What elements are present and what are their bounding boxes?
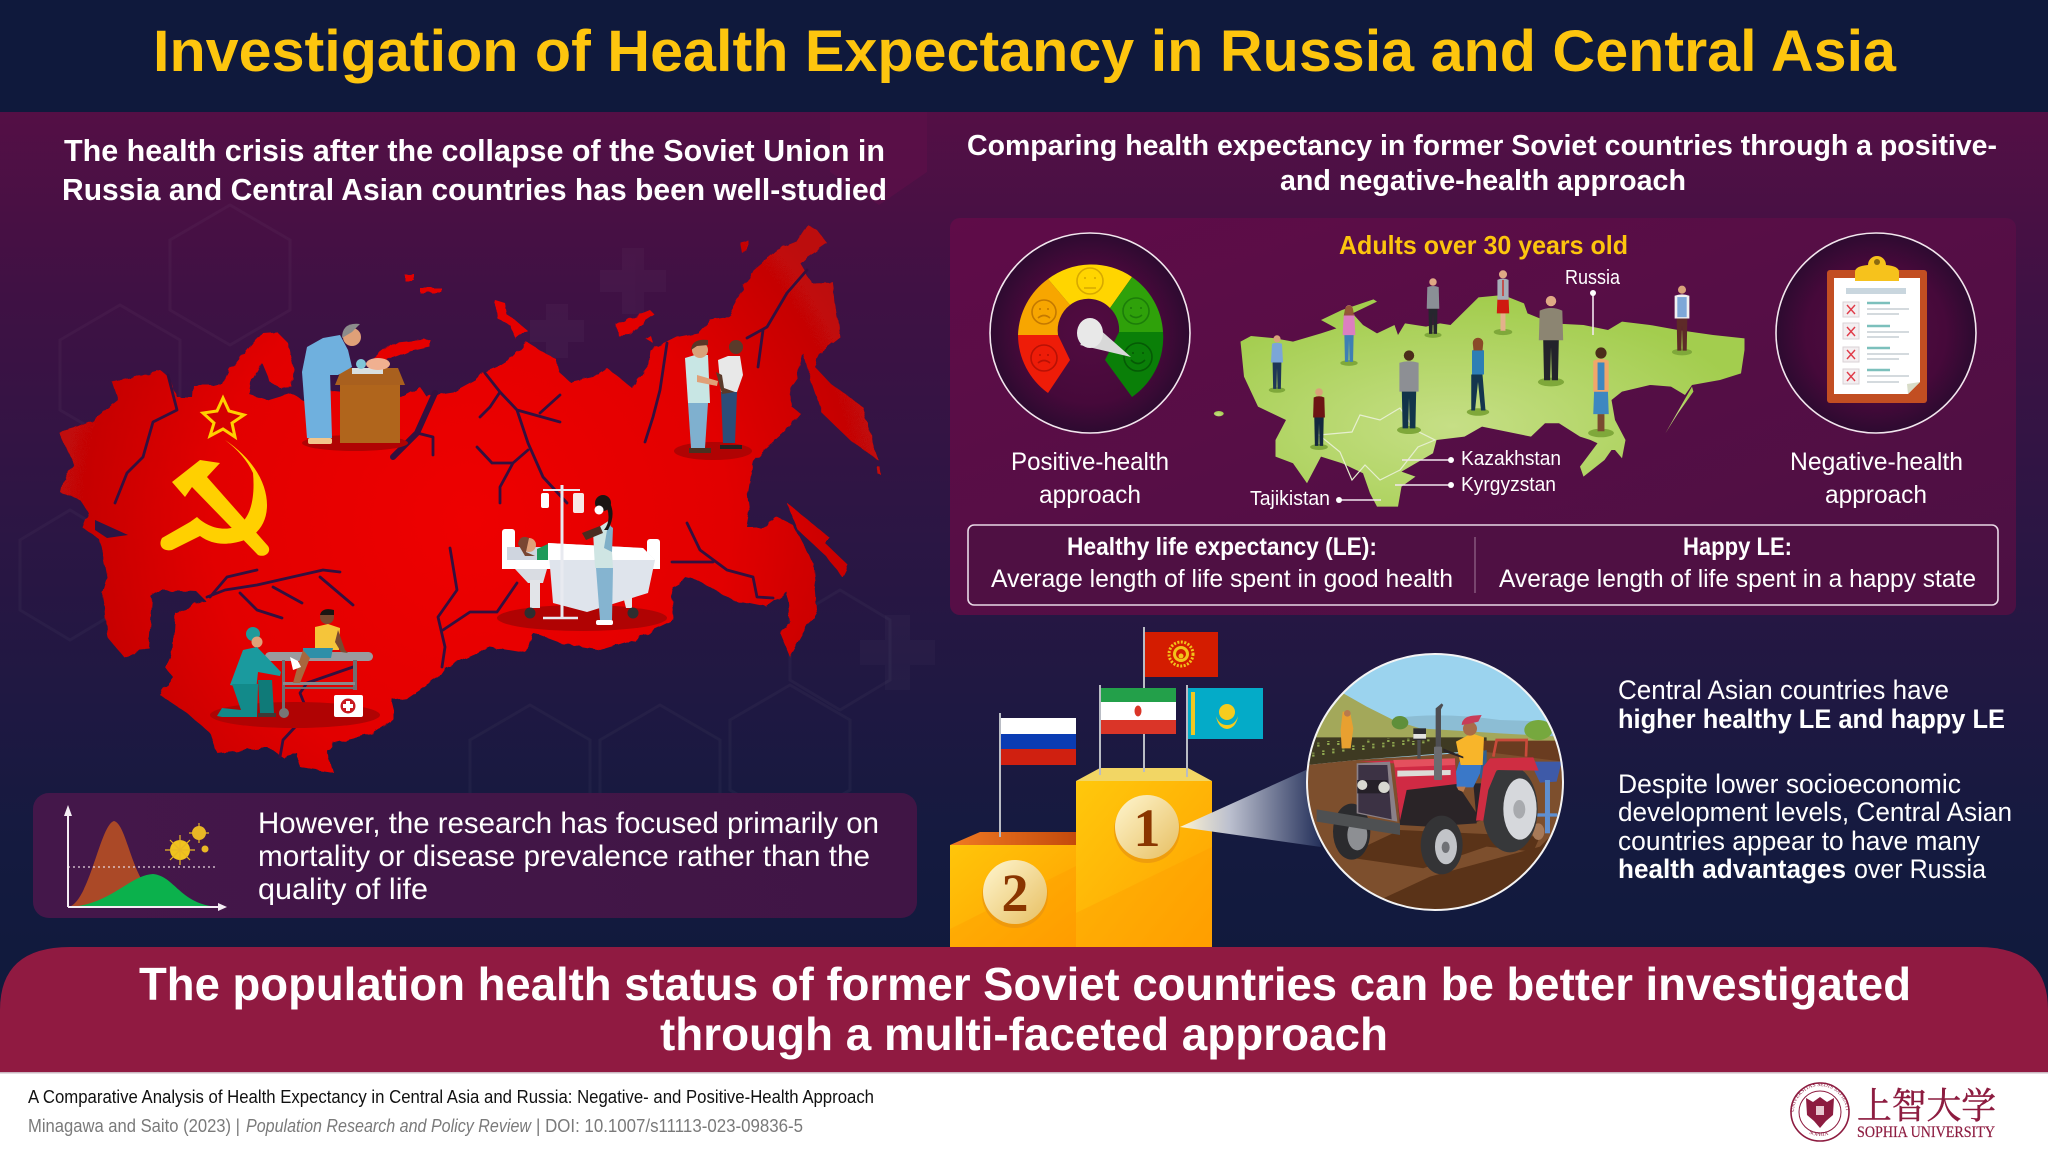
definitions box: Average length of life spent in good health bbox=[991, 565, 1453, 593]
left heading bbox=[62, 133, 887, 207]
title: Investigation of Health Expectancy in Russia and Central Asia bbox=[153, 19, 1897, 84]
soviet map with illustrations bbox=[59, 225, 881, 772]
label: positive-health bbox=[1011, 448, 1169, 509]
illustration: nurse caring for baby bbox=[302, 324, 408, 451]
conclusion banner: The population health status of former Soviet countries can be better investigated bbox=[139, 958, 1911, 1010]
map labels: Russia bbox=[1565, 267, 1621, 289]
definitions box: Average length of life spent in a happy state bbox=[1499, 565, 1976, 593]
illustration: medic treating patient on gurney bbox=[210, 609, 380, 728]
right heading: Comparing health expectancy in former Soviet countries through a positive- bbox=[967, 130, 1997, 162]
podium with flags bbox=[950, 627, 1321, 948]
definitions box: Happy LE: bbox=[1683, 533, 1792, 561]
person 7 bbox=[1397, 350, 1421, 434]
left heading: The health crisis after the collapse of the Soviet Union in bbox=[64, 133, 885, 168]
text block: Central Asia findings: Despite lower socioeconomic bbox=[1618, 769, 1961, 799]
logo: Sophia University: SOPHIA UNIVERSITY bbox=[1857, 1124, 1995, 1141]
callout text bbox=[258, 807, 879, 906]
label: positive-health: Positive-health bbox=[1011, 448, 1169, 476]
panel: research focus note bbox=[33, 793, 917, 918]
citation details bbox=[28, 1116, 803, 1136]
citation title: A Comparative Analysis of Health Expectancy in Central Asia and Russia: Negative- and Positive-Health Approach bbox=[28, 1087, 874, 1107]
logo: Sophia University: SOPHIA bbox=[1809, 1130, 1828, 1136]
left heading: Russia and Central Asian countries has been well-studied bbox=[62, 172, 887, 207]
text block: Central Asia findings: over Russia bbox=[1854, 854, 1987, 884]
map: red USSR outline bbox=[59, 225, 881, 772]
medal 2: 2 bbox=[1002, 863, 1028, 923]
person 3 bbox=[1424, 278, 1442, 338]
right heading: and negative-health approach bbox=[1280, 165, 1686, 197]
flag: Iran bbox=[1099, 685, 1176, 775]
illustration: hospital bed with IV drip bbox=[497, 485, 667, 631]
definitions box bbox=[968, 525, 1998, 605]
person 9 bbox=[1588, 347, 1614, 437]
callout text: mortality or disease prevalence rather than the bbox=[258, 840, 870, 873]
person 10 bbox=[1310, 388, 1328, 450]
map labels: Kyrgyzstan bbox=[1461, 474, 1556, 496]
title bar bbox=[0, 0, 2048, 112]
callout text: quality of life bbox=[258, 873, 428, 906]
map: rivers and cracks bbox=[115, 270, 807, 757]
conclusion banner: through a multi-faceted approach bbox=[660, 1008, 1388, 1060]
icon: positive-health gauge bbox=[990, 233, 1190, 433]
medal 1: 1 bbox=[1134, 798, 1160, 858]
person 5 bbox=[1538, 296, 1564, 386]
icon: negative-health clipboard bbox=[1776, 233, 1976, 433]
callout text: However, the research has focused primarily on bbox=[258, 807, 879, 840]
right heading bbox=[967, 130, 1997, 197]
illustration: doctor examining patient bbox=[674, 340, 752, 460]
panel: comparison approach bbox=[950, 218, 2016, 615]
person 4 bbox=[1494, 270, 1512, 335]
text block: Central Asia findings: higher healthy LE and happy LE bbox=[1618, 704, 2005, 734]
map: green Eurasia with people bbox=[1214, 270, 1744, 507]
text block: Central Asia findings bbox=[1618, 675, 2012, 884]
map labels: Tajikistan bbox=[1250, 488, 1330, 510]
label: negative-health: Negative-health bbox=[1790, 448, 1963, 476]
second place block bbox=[950, 832, 1076, 948]
label: negative-health bbox=[1790, 448, 1963, 509]
illustration: farmer on tractor bbox=[1300, 650, 1570, 915]
flag: Russia bbox=[999, 713, 1076, 837]
citation details: | DOI: 10.1007/s11113-023-09836-5 bbox=[536, 1116, 803, 1136]
map labels bbox=[1250, 267, 1621, 510]
chart: mortality and disease curves bbox=[64, 805, 227, 911]
conclusion banner bbox=[0, 947, 2048, 1072]
person 1 bbox=[1269, 335, 1285, 393]
logo: Sophia University: UNIVERSITAS SEDIS SAPIENTIAE bbox=[1790, 1082, 1850, 1112]
text block: Central Asia findings: countries appear to have many bbox=[1618, 826, 1980, 856]
citation details: Population Research and Policy Review bbox=[246, 1116, 532, 1136]
person 8 bbox=[1467, 338, 1489, 416]
medal 2 bbox=[982, 860, 1048, 928]
flag: Kyrgyzstan bbox=[1143, 627, 1218, 772]
first place block bbox=[1076, 768, 1212, 948]
flag: Kazakhstan bbox=[1186, 685, 1263, 777]
label: positive-health: approach bbox=[1039, 481, 1141, 509]
label: negative-health: approach bbox=[1825, 481, 1927, 509]
subheading: adults: Adults over 30 years old bbox=[1339, 230, 1628, 260]
icon: hammer and sickle bbox=[160, 398, 269, 556]
beam to tractor bbox=[1180, 770, 1321, 847]
citation details: Minagawa and Saito (2023) | bbox=[28, 1116, 240, 1136]
person 2 bbox=[1340, 305, 1358, 366]
definitions box: Healthy life expectancy (LE): bbox=[1067, 533, 1377, 561]
text block: Central Asia findings: health advantages bbox=[1618, 854, 1846, 884]
logo: Sophia University: 上智大学 bbox=[1857, 1086, 1996, 1126]
text block: Central Asia findings: development levels, Central Asian bbox=[1618, 797, 2012, 827]
medal 1 bbox=[1114, 795, 1180, 863]
text block: Central Asia findings: Central Asian countries have bbox=[1618, 675, 1949, 705]
map labels: Kazakhstan bbox=[1461, 448, 1561, 470]
map: Azov inlet bbox=[95, 520, 128, 538]
person 6 bbox=[1672, 286, 1692, 355]
